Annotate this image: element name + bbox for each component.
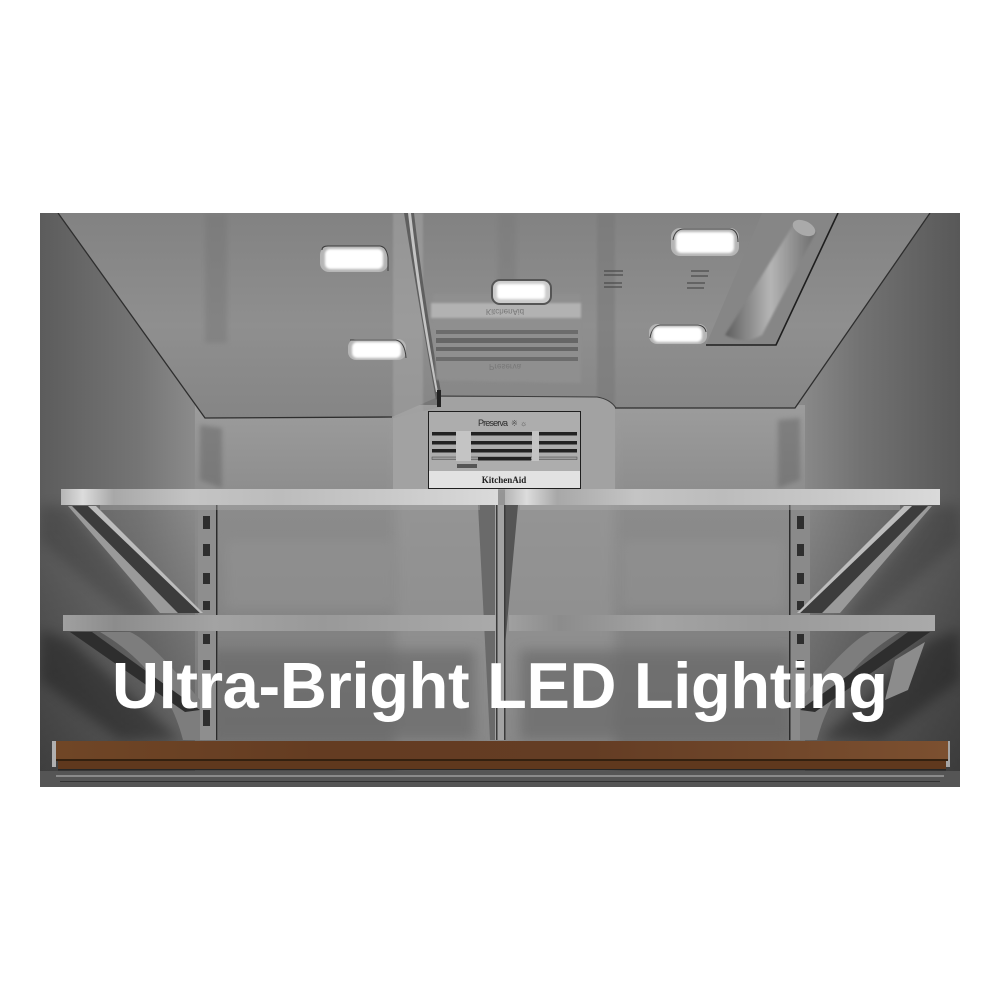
ceiling panel [58,213,930,418]
LED light 4 [671,228,739,256]
upper shelves [61,489,940,510]
reflection of control panel: Preserva [489,362,522,371]
lower shelves [63,615,935,631]
upright rails [198,505,810,740]
LED light 3 [491,279,552,305]
walls [40,213,960,790]
back wall dividing column [393,396,616,490]
upper left bracket [68,506,203,613]
Preserva control panel [428,411,581,489]
fridge interior photo [40,213,960,790]
reflection of control panel [430,302,582,381]
LED light 2 [348,339,406,360]
Preserva control panel: Preserva [478,418,508,428]
upper right bracket [797,506,932,613]
LED light 1 [320,246,388,272]
lower right bracket [800,632,930,740]
air duct tube [706,213,838,345]
shelf brackets [40,505,960,740]
wood trim shelf [40,741,960,787]
wall shadows [40,506,152,615]
lower left bracket [70,632,200,740]
LED light 5 [649,324,707,344]
Preserva control panel: ※ ☼ [511,419,527,428]
vent slots [604,271,709,288]
title: Ultra-Bright LED Lighting [112,649,888,722]
Preserva control panel: KitchenAid [482,475,526,485]
LED lights [320,228,739,360]
infographic: refrigerator interior photo [40,213,960,787]
reflection of control panel: KitchenAid [486,307,524,316]
